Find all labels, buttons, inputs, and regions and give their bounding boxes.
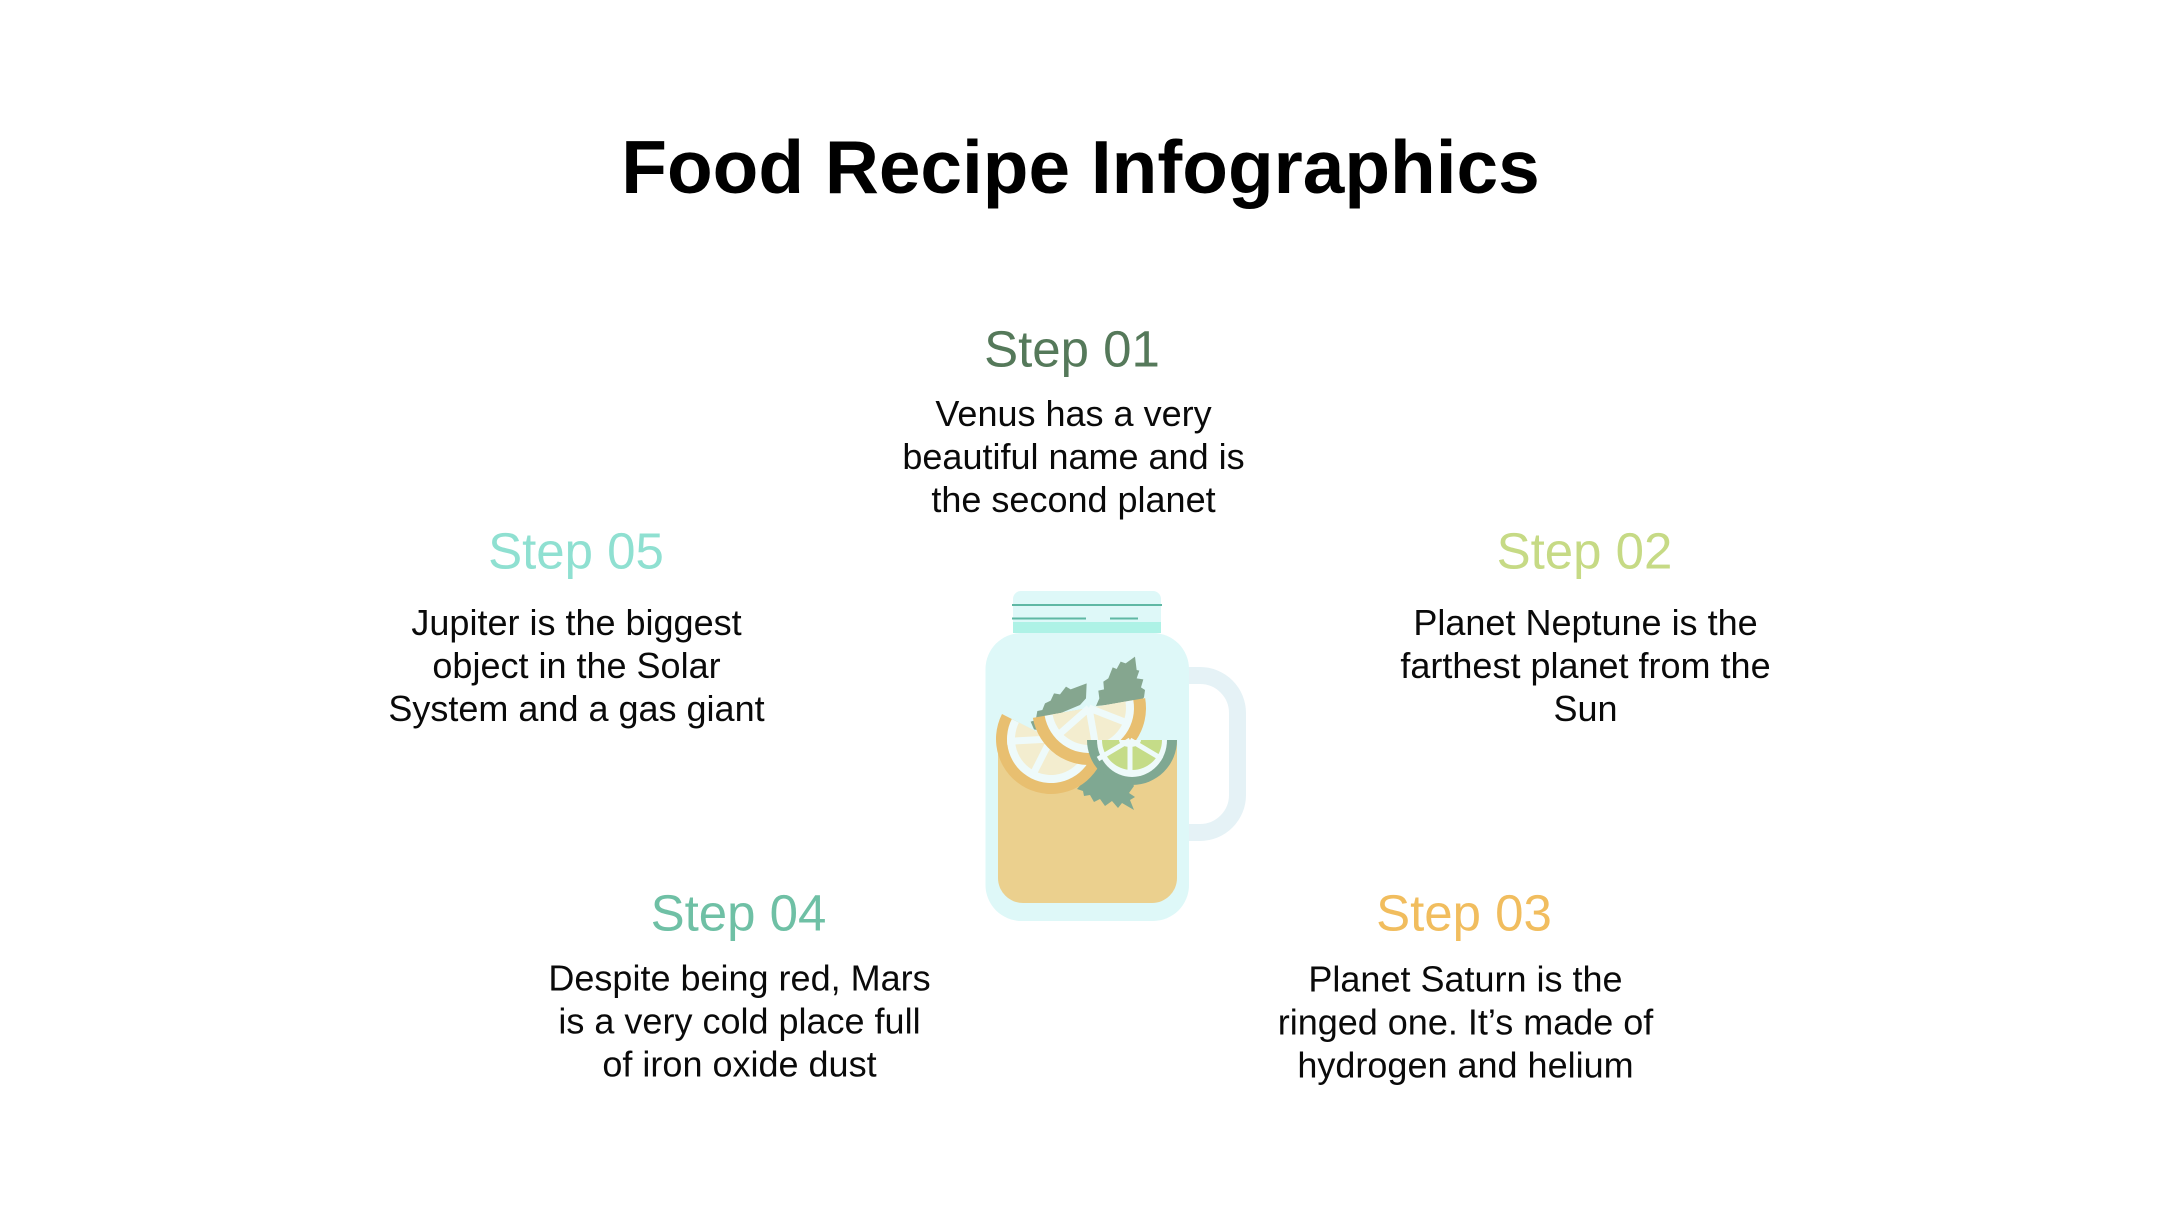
step 04: Step 04 [651,884,826,942]
step 05: System and a gas giant [388,688,765,729]
mint leaves [1031,657,1145,730]
step 01: the second planet [931,479,1216,520]
jar body [986,633,1189,921]
step 03 [1278,884,1654,1086]
step 03: hydrogen and helium [1297,1044,1634,1086]
icon: lemonade jar [977,591,1238,921]
jar lid [1012,591,1162,633]
step 05: Step 05 [488,522,664,580]
step 05: Jupiter is the biggest [411,602,742,643]
lemon slice middle [1033,698,1155,774]
jar handle [1185,676,1238,832]
step 03: Step 03 [1376,884,1552,942]
step 03: Planet Saturn is the [1308,958,1623,1000]
step 02: Planet Neptune is the [1413,602,1758,643]
step 03: ringed one. It’s made of [1278,1002,1654,1042]
step 01: Venus has a very [935,393,1212,434]
step 02: Sun [1553,688,1618,729]
liquid [998,740,1177,903]
step 05 [388,522,765,729]
step 01: Step 01 [984,320,1160,378]
step 01: beautiful name and is [902,436,1245,477]
step 05: object in the Solar [432,645,721,686]
step 02: Step 02 [1497,522,1672,580]
lemon slice left [977,714,1100,813]
step 04: is a very cold place full [558,1000,921,1042]
step 02 [1400,522,1771,729]
step 04: Despite being red, Mars [548,958,931,998]
step 02: farthest planet from the [1400,645,1771,686]
title: Food Recipe Infographics [621,125,1540,209]
step 04 [548,884,931,1084]
step 01 [902,320,1245,520]
lime slice [1087,740,1177,785]
step 04: of iron oxide dust [602,1044,877,1084]
mint leaf bottom [1077,765,1135,810]
